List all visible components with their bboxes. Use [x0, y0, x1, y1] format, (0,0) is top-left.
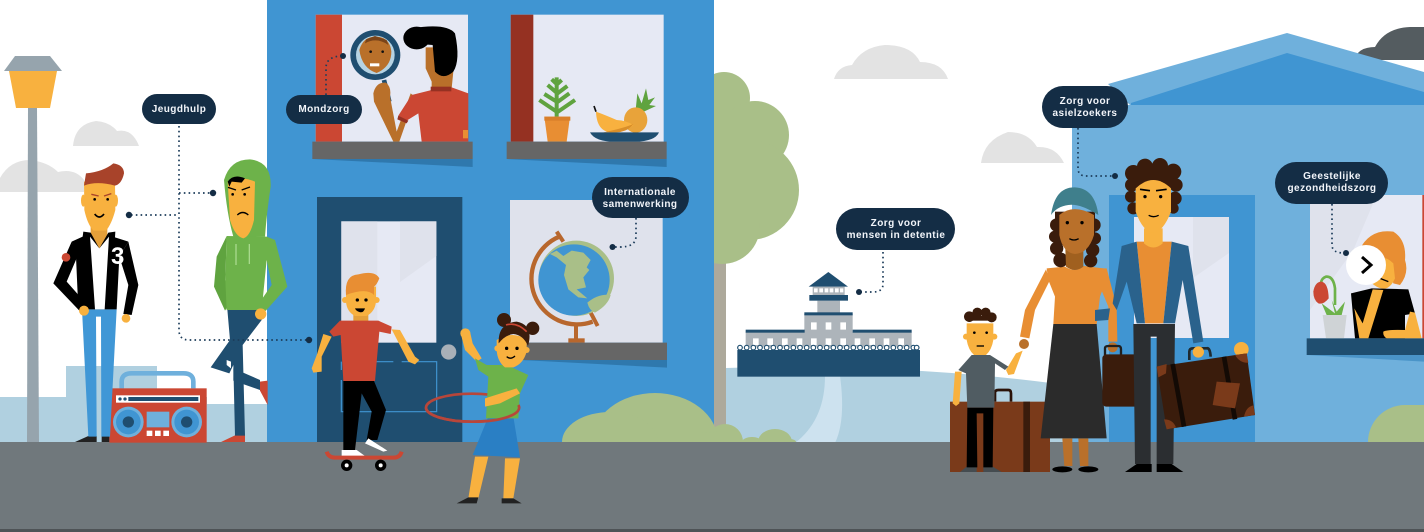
- door: left building: [317, 197, 462, 442]
- label: Zorg voor asielzoekers with connector: asielzoekers: [1053, 108, 1117, 119]
- label: Zorg voor asielzoekers with connector: [1042, 86, 1128, 179]
- label: Internationale samenwerking with connector: samenwerking: [603, 199, 677, 210]
- cloud: dark top right: [1354, 27, 1424, 60]
- building: left blue block: [267, 0, 714, 443]
- cloud: centre upper: [834, 45, 948, 79]
- label: Zorg voor asielzoekers with connector: Zorg voor: [1060, 96, 1110, 107]
- boombox: [109, 373, 207, 443]
- label: Mondzorg with connector: Mondzorg: [298, 104, 350, 115]
- family: boy with suitcase: [950, 308, 1050, 472]
- ground street: [0, 442, 1424, 532]
- tree: [684, 72, 799, 443]
- bush: right: [1368, 405, 1424, 479]
- window: globe: [510, 200, 667, 368]
- label: Geestelijke gezondheidszorg with connector: gezondheidszorg: [1288, 183, 1376, 194]
- label: Mondzorg with connector: [286, 53, 362, 124]
- person: boy on skateboard: [312, 273, 419, 471]
- window: mental health: [1307, 195, 1424, 362]
- person: young man in black jacket: [53, 163, 138, 442]
- building: right house: [1072, 33, 1424, 443]
- person: young man in black jacket: 3: [111, 243, 124, 270]
- prison: [737, 272, 920, 377]
- label: Geestelijke gezondheidszorg with connector: Geestelijke: [1303, 171, 1361, 182]
- label: Zorg voor mensen in detentie with connector: [836, 208, 955, 295]
- path towards prison: [795, 376, 842, 443]
- label: Jeugdhulp with connector: Jeugdhulp: [152, 104, 206, 115]
- person: girl with hula hoop: [426, 313, 539, 503]
- bushes right of left building: [707, 424, 796, 460]
- label: Geestelijke gezondheidszorg with connector: [1275, 162, 1388, 256]
- next arrow button: [1346, 245, 1386, 285]
- window: plant and fruit: [507, 15, 667, 167]
- family: man with suitcase: [1095, 158, 1255, 472]
- family: woman with bag: [1019, 187, 1148, 472]
- hill behind prison: [726, 367, 1073, 443]
- person: teen in green hoodie: [211, 159, 287, 442]
- door: right house: [1109, 195, 1255, 443]
- cloud: left upper: [73, 121, 139, 146]
- label: Internationale samenwerking with connector: Internationale: [604, 187, 676, 198]
- label: Jeugdhulp with connector: [126, 94, 312, 343]
- bush in front of left building: [562, 393, 724, 491]
- label: Zorg voor mensen in detentie with connector: mensen in detentie: [847, 230, 945, 241]
- label: Zorg voor mensen in detentie with connector: Zorg voor: [871, 218, 921, 229]
- cloud: left lower: [0, 160, 84, 192]
- window: dental care: [312, 15, 473, 167]
- cloud: centre lower: [981, 132, 1064, 163]
- hills behind left street: [0, 366, 267, 443]
- label: Internationale samenwerking with connector: [592, 177, 689, 250]
- street lamp: [4, 56, 62, 442]
